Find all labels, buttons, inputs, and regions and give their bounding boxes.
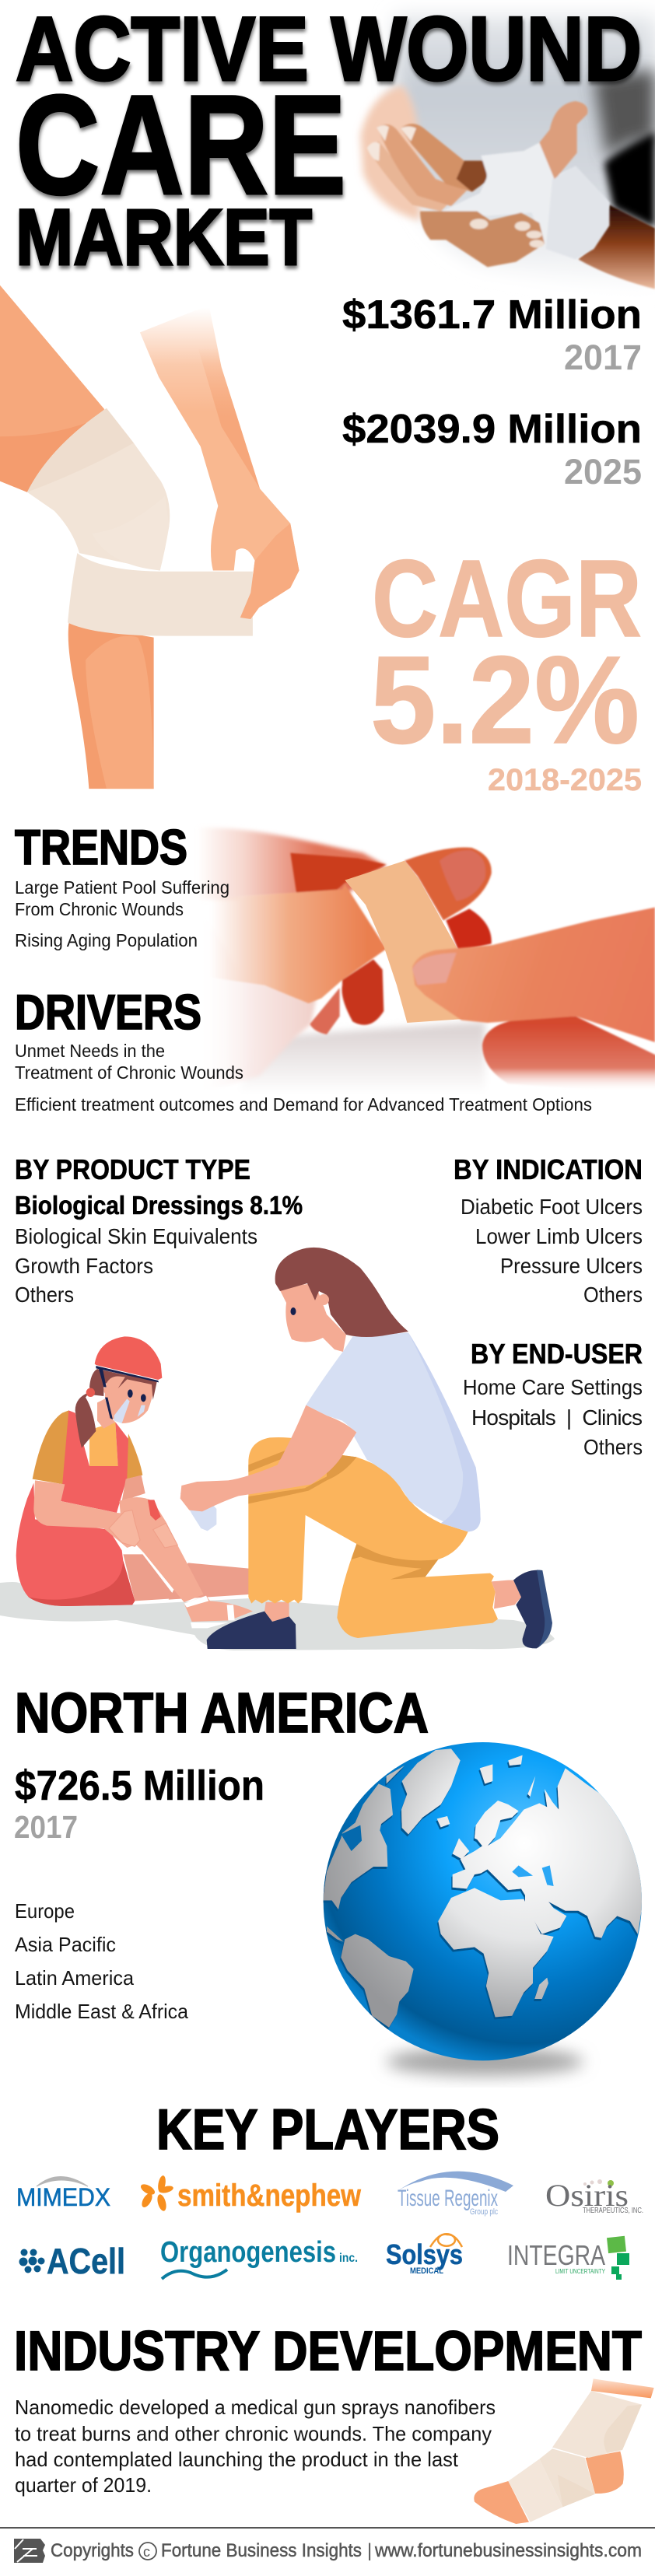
highlighted segment: Biological Dressings 8.1% [15, 1191, 303, 1220]
shirt [33, 1410, 142, 1484]
segment 4: Others [15, 1283, 74, 1307]
region 1: Europe [15, 1899, 75, 1923]
arm and hand [140, 305, 299, 619]
back leg [123, 1554, 249, 1601]
bandage strip [345, 861, 464, 1023]
t-shirt [306, 1332, 481, 1531]
arm [180, 1405, 356, 1511]
logo: Tissue Regenix: Group plc [470, 2207, 498, 2217]
nails [367, 125, 416, 161]
trend item 1 line 1: Large Patient Pool Suffering [15, 877, 229, 898]
lower leg [68, 622, 154, 789]
driver item 1 line 2: Treatment of Chronic Wounds [15, 1062, 243, 1083]
drivers heading: DRIVERS [15, 985, 201, 1040]
region 2: Asia Pacific [15, 1933, 116, 1956]
title [16, 0, 642, 282]
logo: Solsys [386, 2234, 463, 2276]
industry development text: to treat burns and other chronic wounds. The company [15, 2422, 492, 2445]
logo: Smith & Nephew [139, 2175, 362, 2213]
fingers over strip [240, 523, 299, 619]
dress bib [61, 1410, 128, 1513]
illustration: injured child [16, 1336, 253, 1628]
value 2017: $1361.7 Million [342, 292, 642, 338]
item 4: Others [583, 1283, 643, 1307]
globe shadow [387, 2047, 583, 2076]
trend item 2: Rising Aging Population [15, 930, 198, 950]
drivers [15, 985, 592, 1115]
regional value: $726.5 Million [15, 1762, 264, 1809]
wound [148, 1500, 161, 1521]
logo: MiMedx: MIMEDX [16, 2183, 110, 2211]
CAGR [370, 537, 642, 797]
logo: Solsys: MEDICAL [410, 2266, 443, 2276]
photo: bandaged hand [360, 16, 655, 289]
industry development text [15, 2396, 496, 2497]
CAGR period: 2018-2025 [488, 763, 642, 797]
website: www.fortunebusinessinsights.com [374, 2540, 642, 2561]
globe [323, 1742, 643, 2076]
segment 2: Biological Skin Equivalents [15, 1224, 257, 1248]
trousers [248, 1437, 498, 1638]
item 1: Diabetic Foot Ulcers [461, 1195, 643, 1219]
thigh [0, 285, 104, 492]
illustration: bandaged foot [474, 2378, 654, 2524]
item 3: Others [583, 1435, 643, 1459]
item 1: Home Care Settings [463, 1375, 643, 1399]
year: 2017 [14, 1809, 78, 1845]
item 2: Hospitals | Clinics [471, 1405, 643, 1430]
logo: ACell: ACell [47, 2241, 125, 2281]
region 3: Latin America [15, 1966, 135, 1990]
child head [75, 1336, 162, 1448]
woman head [275, 1248, 408, 1352]
knee bandage [27, 408, 170, 570]
logo: Smith & Nephew: smith&nephew [177, 2179, 362, 2213]
footer [14, 2539, 642, 2563]
north america [14, 1682, 429, 2023]
inland seas [512, 1865, 554, 1886]
driver item 2: Efficient treatment outcomes and Demand for Advanced Treatment Options [15, 1094, 592, 1115]
logo: Organogenesis: inc. [339, 2252, 358, 2265]
foot and sandal [184, 1596, 253, 1628]
logo: Integra: LIMIT UNCERTAINTY [555, 2267, 605, 2275]
segment 3: Growth Factors [15, 1254, 153, 1278]
icon: copyright symbol [139, 2543, 156, 2560]
item 3: Pressure Ulcers [500, 1254, 643, 1278]
title line 2: CARE [16, 65, 346, 224]
trends [15, 821, 229, 950]
logo: ACell [19, 2241, 125, 2281]
segmentation: by end-user [463, 1338, 643, 1459]
globe sphere [324, 1742, 642, 2060]
segmentation: by product type [15, 1153, 303, 1307]
year 2017: 2017 [564, 338, 642, 377]
illustration: woman caregiver [180, 1332, 552, 1649]
trends heading: TRENDS [15, 821, 187, 875]
dress [16, 1483, 135, 1606]
separator: | [367, 2540, 372, 2561]
heading: BY INDICATION [454, 1153, 643, 1185]
logo: Tissue Regenix: Tissue Regenix [398, 2186, 498, 2211]
region 4: Middle East & Africa [15, 2000, 189, 2023]
cloth [180, 1483, 216, 1531]
ground shadow [0, 1582, 555, 1650]
bandage strip [68, 553, 253, 636]
icon: copyright symbol: c [143, 2544, 150, 2560]
hands [109, 1510, 177, 1548]
front shoe [207, 1602, 296, 1649]
copyright text: Copyrights [51, 2540, 134, 2561]
market values [342, 292, 642, 492]
company name: Fortune Business Insights [161, 2540, 362, 2561]
industry development text: had contemplated launching the product in the last [15, 2448, 459, 2471]
icon: company logo [14, 2539, 45, 2563]
footer divider [0, 2527, 655, 2529]
driver item 1 line 1: Unmet Needs in the [15, 1041, 165, 1061]
logo: Tissue Regenix [398, 2172, 513, 2217]
heading: BY PRODUCT TYPE [15, 1153, 250, 1185]
CAGR value: 5.2% [370, 630, 639, 769]
continents [323, 1748, 643, 2028]
segmentation: by indication [454, 1153, 643, 1307]
logo: Organogenesis: Organogenesis [160, 2236, 336, 2269]
year 2025: 2025 [564, 452, 642, 492]
industry development text: Nanomedic developed a medical gun sprays nanofibers [15, 2396, 496, 2419]
industry development text: quarter of 2019. [15, 2473, 152, 2497]
trailing shoe [492, 1570, 552, 1648]
arms and leg [33, 1475, 204, 1602]
heading: NORTH AMERICA [15, 1682, 429, 1745]
value 2025: $2039.9 Million [342, 407, 642, 452]
photo: finger bandage [194, 827, 655, 1094]
item 2: Lower Limb Ulcers [475, 1224, 643, 1248]
logo: Integra: INTEGRA [507, 2239, 605, 2271]
trend item 1 line 2: From Chronic Wounds [15, 899, 184, 919]
logo: Osiris: Osiris [545, 2178, 629, 2213]
illustration: bandaged knee and hand [0, 285, 299, 789]
logo: Solsys: Solsys [386, 2238, 463, 2270]
key players heading: KEY PLAYERS [156, 2098, 499, 2161]
title line 3: MARKET [16, 193, 312, 282]
